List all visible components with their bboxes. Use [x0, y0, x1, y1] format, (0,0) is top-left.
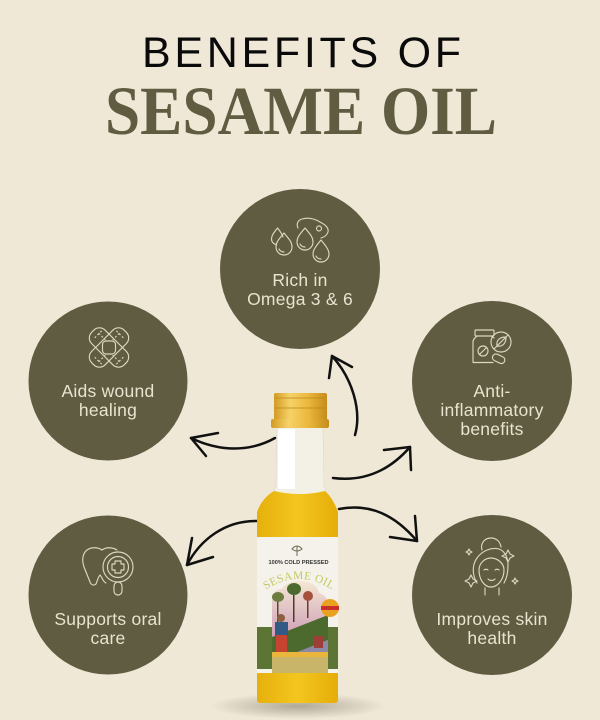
label: care	[90, 628, 126, 648]
arrow: to omega	[329, 356, 357, 435]
label: Anti-	[473, 381, 511, 401]
bottle shadow	[210, 693, 386, 719]
label logo	[292, 546, 302, 556]
bottle label	[257, 537, 338, 673]
oil body	[257, 491, 338, 703]
product bottle	[222, 393, 374, 718]
glass neck	[273, 427, 327, 495]
arrow: to wound healing	[191, 433, 275, 456]
label: Aids wound	[62, 381, 154, 401]
panel: supports oral care	[28, 516, 188, 674]
arrow: to oral care	[187, 521, 258, 565]
label: health	[467, 628, 517, 648]
label product name: SESAME OIL	[263, 572, 332, 589]
label: Supports oral	[54, 609, 162, 629]
icon: crossed bandages	[86, 325, 132, 370]
gold cap	[274, 393, 327, 421]
label: benefits	[460, 419, 524, 439]
label: Omega 3 & 6	[247, 289, 353, 309]
arrow: to anti-inflammatory	[333, 447, 411, 479]
arrow: to skin health	[339, 507, 417, 541]
label: Rich in	[272, 270, 328, 290]
label: Improves skin	[436, 609, 548, 629]
title: benefits of: BENEFITS OF	[142, 29, 461, 77]
label: inflammatory	[440, 400, 544, 420]
icon: face with hair towel and sparkles	[465, 538, 518, 595]
icon: pill bottle and leaf	[473, 330, 511, 365]
label: healing	[79, 400, 137, 420]
panel: anti-inflammatory benefits	[412, 301, 572, 461]
icon: tooth and magnifier	[83, 548, 133, 595]
quality seal	[321, 599, 339, 617]
label heading: 100% COLD PRESSED	[268, 560, 328, 566]
icon: oil drops and seed	[271, 218, 329, 262]
panel: rich in omega	[220, 189, 380, 349]
label illustration	[272, 581, 328, 673]
label green band	[257, 627, 338, 669]
title: sesame oil: SESAME OIL	[105, 73, 497, 149]
panel: aids wound healing	[28, 302, 188, 460]
panel: improves skin health	[412, 515, 572, 675]
